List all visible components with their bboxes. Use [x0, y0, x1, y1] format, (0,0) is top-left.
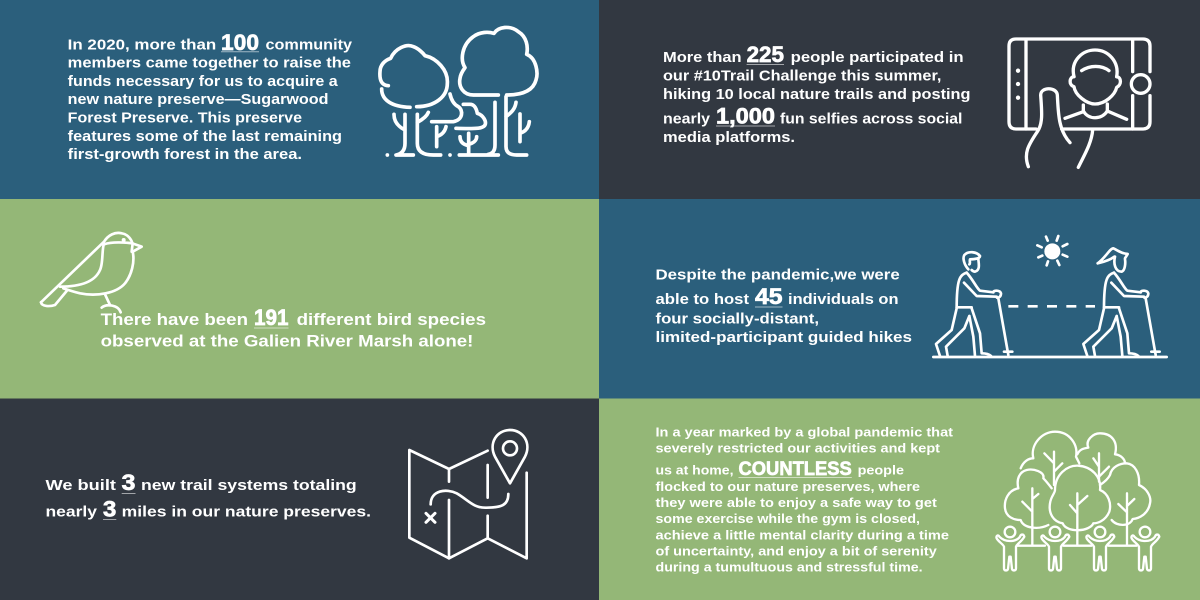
- icon: people under trees: [996, 432, 1159, 570]
- text: pandemic visitors: severely restricted our activities and kept: [656, 441, 941, 456]
- panel: bird species: [0, 199, 599, 398]
- text: forest preserve fundraising: funds necessary for us to acquire a: [68, 73, 338, 90]
- text: trail challenge selfies: our #10Trail Challenge this summer,: [663, 68, 941, 84]
- text: socially distant hikes: [656, 266, 912, 346]
- text: forest preserve fundraising: [68, 30, 353, 163]
- text: trail challenge selfies: 1,000: [716, 104, 775, 128]
- person 4: [1131, 527, 1159, 570]
- text: bird species count: There have been: [101, 311, 248, 329]
- text: pandemic visitors: during a tumultuous and stressful time.: [656, 560, 923, 575]
- text: pandemic visitors: of uncertainty, and enjoy a bit of serenity: [656, 544, 937, 559]
- text: pandemic visitors: us at home,: [656, 463, 734, 478]
- text: bird species count: observed at the Galien River Marsh alone!: [101, 333, 473, 351]
- text: trail challenge selfies: fun selfies across social: [780, 110, 962, 128]
- text: trail challenge selfies: [663, 42, 970, 146]
- text: trail challenge selfies: nearly: [663, 110, 711, 128]
- text: forest preserve fundraising: In 2020, more than: [68, 36, 216, 54]
- person 1: [996, 527, 1024, 570]
- text: socially distant hikes: four socially-distant,: [656, 310, 819, 328]
- person 2: [1041, 527, 1069, 570]
- text: trail systems built: [46, 470, 371, 522]
- text: pandemic visitors: people: [858, 463, 904, 478]
- panel: trail challenge: [599, 0, 1200, 199]
- text: pandemic visitors: COUNTLESS: [738, 458, 852, 480]
- text: forest preserve fundraising: community: [266, 36, 353, 54]
- text: trail systems built: new trail systems totaling: [141, 477, 357, 494]
- text: forest preserve fundraising: new nature preserve—Sugarwood: [68, 91, 328, 108]
- text: pandemic visitors: achieve a little mental clarity during a time: [656, 527, 949, 542]
- text: bird species count: [101, 305, 486, 351]
- text: forest preserve fundraising: features some of the last remaining: [68, 128, 342, 145]
- icon: trees: [380, 27, 537, 155]
- text: socially distant hikes: limited-participant guided hikes: [656, 329, 912, 346]
- person 3: [1086, 527, 1114, 570]
- panel: new trails: [0, 398, 599, 600]
- text: trail challenge selfies: 225: [747, 42, 784, 67]
- text: forest preserve fundraising: Forest Preserve. This preserve: [68, 110, 302, 126]
- text: forest preserve fundraising: first-growth forest in the area.: [68, 146, 302, 163]
- text: bird species count: different bird species: [297, 311, 486, 329]
- text: trail systems built: 3: [122, 470, 136, 495]
- icon: bird: [41, 233, 142, 312]
- text: pandemic visitors: some exercise while the gym is closed,: [656, 511, 920, 526]
- text: trail systems built: 3: [103, 497, 116, 522]
- icon: selfie on phone: [1009, 39, 1150, 167]
- text: trail challenge selfies: media platforms.: [663, 129, 795, 146]
- text: socially distant hikes: 45: [755, 284, 782, 309]
- icon: two hikers with sun: [933, 236, 1167, 357]
- man: [936, 252, 1012, 356]
- text: socially distant hikes: individuals on: [788, 291, 898, 308]
- text: pandemic visitors: they were able to enjoy a safe way to get: [656, 495, 937, 510]
- woman: [1083, 248, 1160, 356]
- icon: map with pin: [409, 430, 527, 558]
- text: trail systems built: nearly: [46, 504, 98, 521]
- text: socially distant hikes: able to host: [656, 291, 749, 308]
- text: bird species count: 191: [254, 305, 288, 330]
- text: pandemic visitors: flocked to our nature preserves, where: [656, 479, 920, 494]
- text: pandemic visitors: [656, 425, 954, 575]
- text: forest preserve fundraising: 100: [221, 30, 259, 55]
- text: trail systems built: We built: [46, 477, 116, 494]
- panel: guided hikes: [599, 199, 1200, 398]
- text: pandemic visitors: In a year marked by a global pandemic that: [656, 425, 954, 440]
- text: trail systems built: miles in our nature preserves.: [122, 504, 371, 521]
- text: forest preserve fundraising: members came together to raise the: [68, 54, 351, 72]
- text: trail challenge selfies: hiking 10 local nature trails and posting: [663, 86, 970, 103]
- panel: countless visitors: [599, 398, 1200, 600]
- text: trail challenge selfies: More than: [663, 49, 742, 66]
- text: socially distant hikes: Despite the pandemic,we were: [656, 266, 900, 283]
- panel: forest preserve: [0, 0, 599, 199]
- text: trail challenge selfies: people participated in: [791, 49, 964, 66]
